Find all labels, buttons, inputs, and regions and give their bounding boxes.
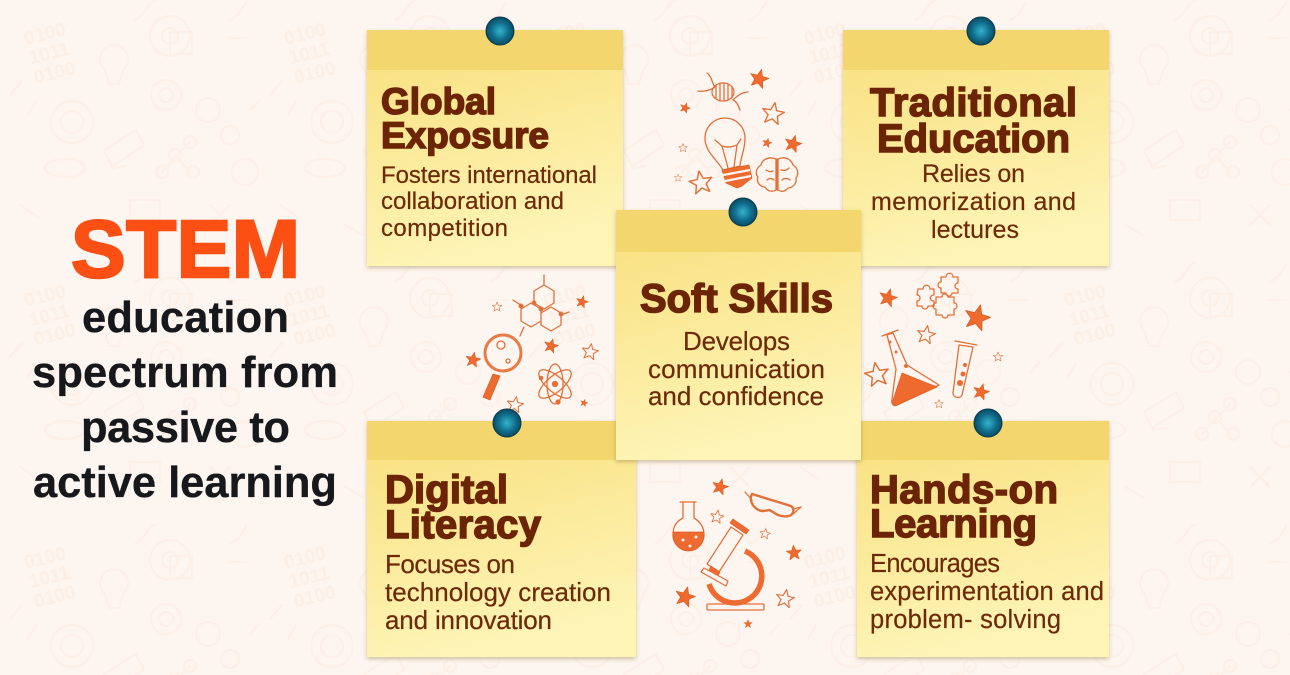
note paper bbox=[843, 30, 1109, 266]
icon: light bulb bbox=[705, 118, 752, 188]
description bbox=[385, 549, 611, 635]
icon: DNA bbox=[698, 73, 748, 110]
illustration: microscope, flask and goggles bbox=[673, 477, 802, 628]
panel: Global Exposure bbox=[367, 30, 623, 266]
heading: Exposure bbox=[381, 115, 549, 156]
icon: pin 4 bbox=[493, 409, 521, 437]
icon: magnifying glass bbox=[483, 335, 521, 400]
heading: Digital bbox=[385, 468, 508, 512]
description: Develops bbox=[683, 326, 790, 356]
icon: goggles bbox=[745, 492, 801, 516]
heading bbox=[385, 468, 542, 547]
icon: round flask bbox=[673, 502, 704, 551]
icon: microscope bbox=[701, 519, 764, 610]
illustration: molecule, magnifier and atom bbox=[464, 275, 599, 413]
heading: Soft Skills bbox=[640, 277, 833, 321]
icon: atom bbox=[535, 364, 575, 404]
illustration: bulb, DNA and brain bbox=[674, 67, 804, 195]
icon: pin 2 bbox=[967, 17, 995, 45]
subtitle line 3: passive to bbox=[81, 404, 290, 452]
description: problem- solving bbox=[870, 606, 1061, 634]
heading: Hands-on bbox=[870, 468, 1058, 512]
stars bbox=[863, 286, 1003, 408]
stars bbox=[674, 67, 804, 195]
heading bbox=[381, 81, 549, 156]
pins bbox=[486, 17, 1002, 437]
icon: pin 3 bbox=[729, 198, 757, 226]
heading: Literacy bbox=[385, 503, 542, 547]
title: STEM education spectrum bbox=[32, 204, 338, 507]
note paper bbox=[367, 30, 623, 266]
panel: Digital Literacy bbox=[367, 421, 636, 657]
description: technology creation bbox=[385, 577, 611, 607]
illustration: puzzle, flask and test tube bbox=[863, 273, 1003, 408]
note paper bbox=[857, 421, 1109, 657]
panel: Soft Skills bbox=[616, 210, 861, 460]
description bbox=[870, 550, 1104, 634]
heading: Learning bbox=[870, 502, 1037, 546]
description: and confidence bbox=[648, 381, 824, 411]
panel: Hands-on Learning bbox=[857, 421, 1109, 657]
description bbox=[871, 160, 1076, 244]
subtitle line 2: spectrum from bbox=[32, 349, 338, 397]
icon: brain bbox=[756, 158, 798, 191]
stars bbox=[464, 294, 599, 413]
icon: molecule bbox=[513, 275, 569, 336]
icon: test tube bbox=[953, 341, 977, 397]
description bbox=[381, 162, 597, 242]
subtitle line 1: education bbox=[82, 294, 289, 342]
icon: pin 1 bbox=[486, 17, 514, 45]
description: and innovation bbox=[385, 605, 552, 635]
description: Encourages bbox=[870, 550, 1000, 578]
panel: Traditional Education bbox=[843, 30, 1109, 266]
heading: STEM: STEM bbox=[71, 204, 300, 295]
description: Fosters international bbox=[381, 162, 597, 189]
stars bbox=[673, 477, 802, 628]
heading: Traditional bbox=[870, 81, 1077, 125]
description: collaboration and bbox=[381, 188, 564, 215]
heading: Education bbox=[877, 117, 1070, 161]
heading bbox=[870, 81, 1077, 161]
note paper bbox=[616, 210, 861, 460]
icon: conical flask bbox=[882, 330, 939, 406]
description: lectures bbox=[931, 216, 1019, 244]
description: memorization and bbox=[871, 188, 1076, 216]
description: Relies on bbox=[922, 160, 1025, 188]
heading bbox=[870, 468, 1058, 546]
description bbox=[648, 326, 825, 411]
heading: Global bbox=[381, 81, 496, 122]
description: Focuses on bbox=[385, 549, 515, 579]
icon: pin 5 bbox=[974, 409, 1002, 437]
description: competition bbox=[381, 215, 508, 242]
description: experimentation and bbox=[870, 578, 1104, 606]
note paper bbox=[367, 421, 636, 657]
icon: puzzle pieces bbox=[917, 273, 958, 318]
description: communication bbox=[648, 354, 825, 384]
subtitle line 4: active learning bbox=[33, 459, 337, 507]
